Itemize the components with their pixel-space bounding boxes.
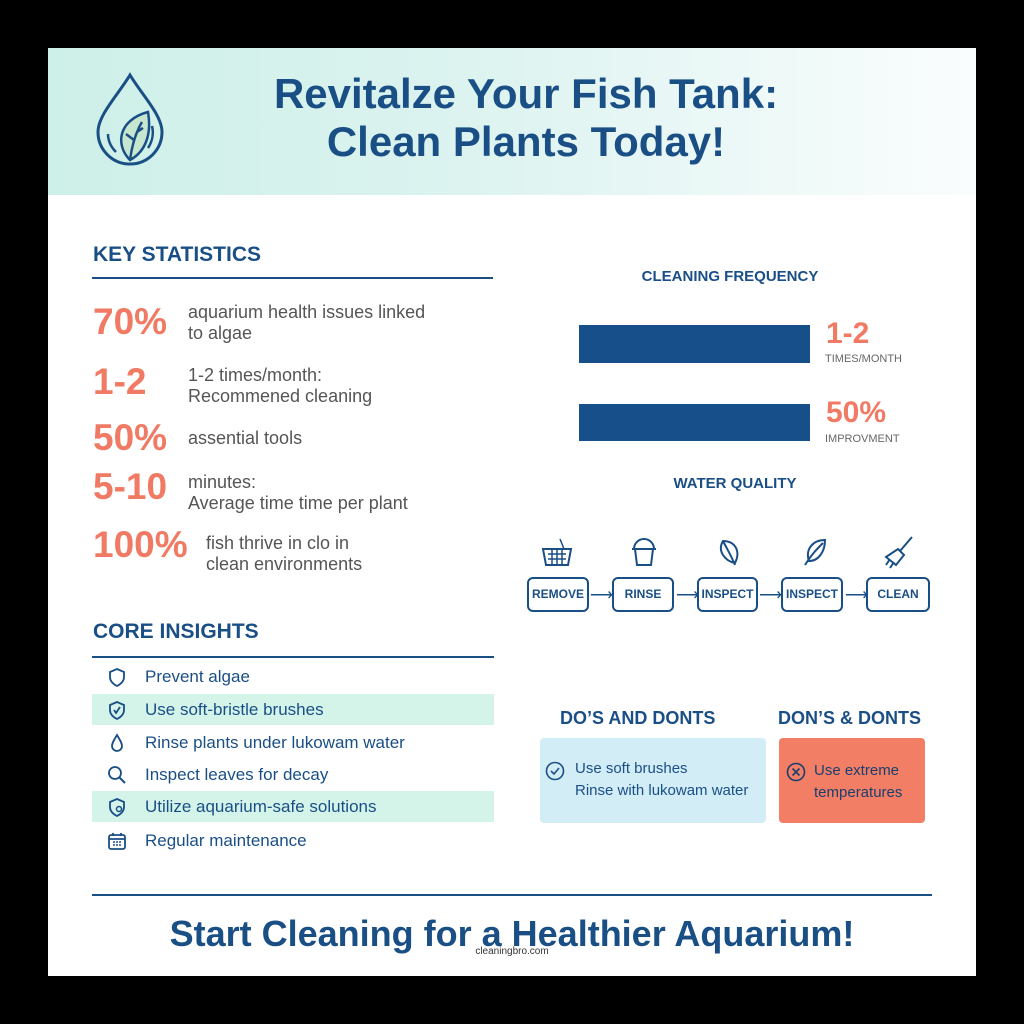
header band: [48, 48, 976, 195]
stat list: to algae: [188, 323, 252, 343]
chart: cleaning frequency: CLEANING FREQUENCY: [642, 268, 818, 285]
icon: leaf: [804, 539, 826, 566]
title: Clean Plants Today!: [327, 118, 725, 165]
chart: cleaning frequency: 50%: [826, 396, 886, 429]
stat list: 5-10: [93, 466, 167, 507]
chart: cleaning frequency: IMPROVMENT: [825, 433, 900, 445]
text: ⟶: [845, 587, 868, 604]
panel: donts: temperatures: [814, 784, 902, 801]
text: ⟶: [759, 587, 782, 604]
stat list: Average time time per plant: [188, 493, 408, 513]
chart: cleaning frequency: 1-2: [826, 317, 869, 350]
insights list: Utilize aquarium-safe solutions: [145, 797, 376, 816]
icon: brush: [884, 536, 913, 568]
insights list: [92, 667, 494, 850]
stat list: 1-2: [93, 361, 146, 402]
insights list: Inspect leaves for decay: [145, 765, 328, 784]
stat list: 70%: [93, 301, 167, 342]
process flow: [542, 536, 913, 568]
text: REMOVE: [532, 587, 584, 601]
panel: donts: [778, 708, 925, 823]
panel: donts: DON’S & DONTS: [778, 708, 921, 728]
stat list: clean environments: [206, 554, 362, 574]
chart: cleaning frequency: TIMES/MONTH: [825, 353, 902, 365]
panel: dos: Use soft brushes: [575, 760, 688, 777]
stat list: fish thrive in clo in: [206, 533, 349, 553]
chart: cleaning frequency: [579, 268, 902, 445]
icon: water drop with leaf: [96, 72, 164, 166]
panel: dos: [540, 708, 766, 823]
panel: donts: Use extreme: [814, 762, 899, 779]
heading: core insights: CORE INSIGHTS: [93, 620, 259, 643]
stat list: assential tools: [188, 428, 302, 448]
stat list: aquarium health issues linked: [188, 302, 425, 322]
text: INSPECT: [701, 587, 754, 601]
icon: bucket: [632, 538, 656, 566]
footer call to action: Start Cleaning for a Healthier Aquarium!: [170, 913, 854, 954]
stat list: minutes:: [188, 472, 256, 492]
heading: key statistics: KEY STATISTICS: [93, 243, 261, 266]
stat list: 100%: [93, 524, 188, 565]
insights list: Rinse plants under lukowam water: [145, 733, 405, 752]
text: ⟶: [590, 587, 613, 604]
watermark: cleaningbro.com: [475, 946, 549, 957]
icon: basket: [542, 538, 572, 566]
text: INSPECT: [786, 587, 838, 601]
insights list: Prevent algae: [145, 667, 250, 686]
stat list: 50%: [93, 417, 167, 458]
title: Revitalze Your Fish Tank:: [274, 70, 778, 117]
heading: water quality: WATER QUALITY: [673, 475, 797, 492]
title: [274, 70, 778, 165]
text: RINSE: [625, 587, 661, 601]
text: CLEAN: [877, 587, 919, 601]
insights list: Use soft-bristle brushes: [145, 700, 324, 719]
stat list: Recommened cleaning: [188, 386, 372, 406]
panel: dos: DO’S AND DONTS: [560, 708, 715, 728]
icon: leaf: [720, 540, 738, 566]
stat list: 1-2 times/month:: [188, 365, 322, 385]
stat list: [93, 301, 425, 574]
insights list: Regular maintenance: [145, 831, 307, 850]
text: ⟶: [676, 587, 699, 604]
panel: dos: Rinse with lukowam water: [575, 782, 748, 799]
